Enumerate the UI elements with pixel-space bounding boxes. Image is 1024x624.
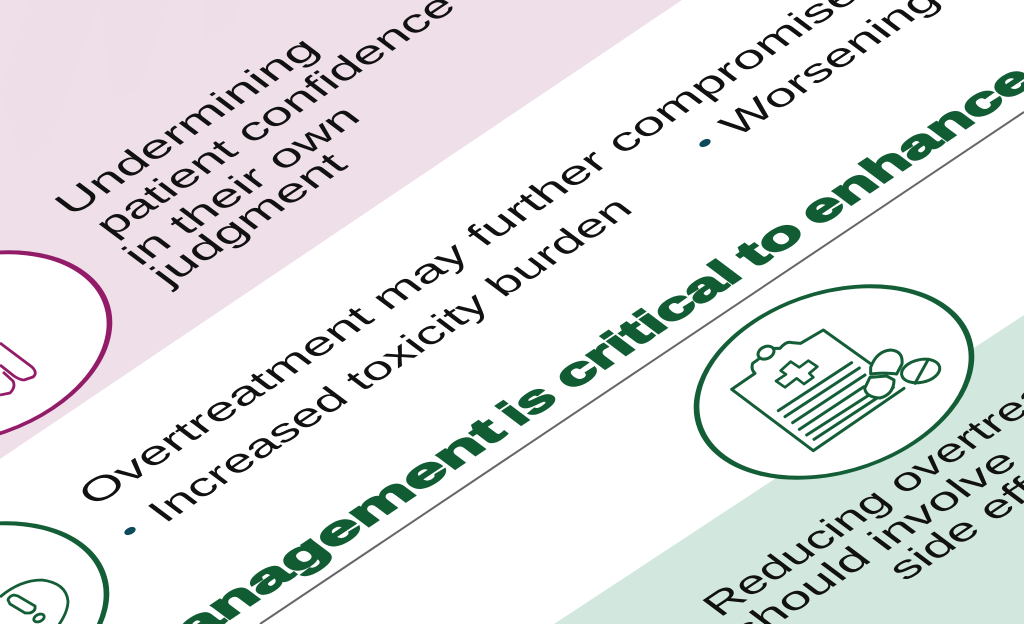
panel: overtreatment text [67,0,948,537]
panel: pink consequence [0,0,682,483]
text: undermining patient confidence: in their own [113,98,369,272]
heading: management is critical: is [487,376,567,433]
panel: green recommendation [554,247,1024,624]
heading: management is critical: to [724,211,815,275]
icon: clipboard with pills [642,247,1024,517]
heading: management is critical: critical [541,253,752,397]
bullet: increased toxicity: Increased toxicity burden [138,190,642,529]
divider rule [260,112,1024,624]
heading: management is critical: enhance [787,58,1024,233]
text: undermining patient confidence: judgment [139,145,356,293]
icon: pink circle with hand [0,213,164,483]
text: undermining patient confidence: Undermining [44,30,328,222]
icon: green alert circle [0,484,161,624]
